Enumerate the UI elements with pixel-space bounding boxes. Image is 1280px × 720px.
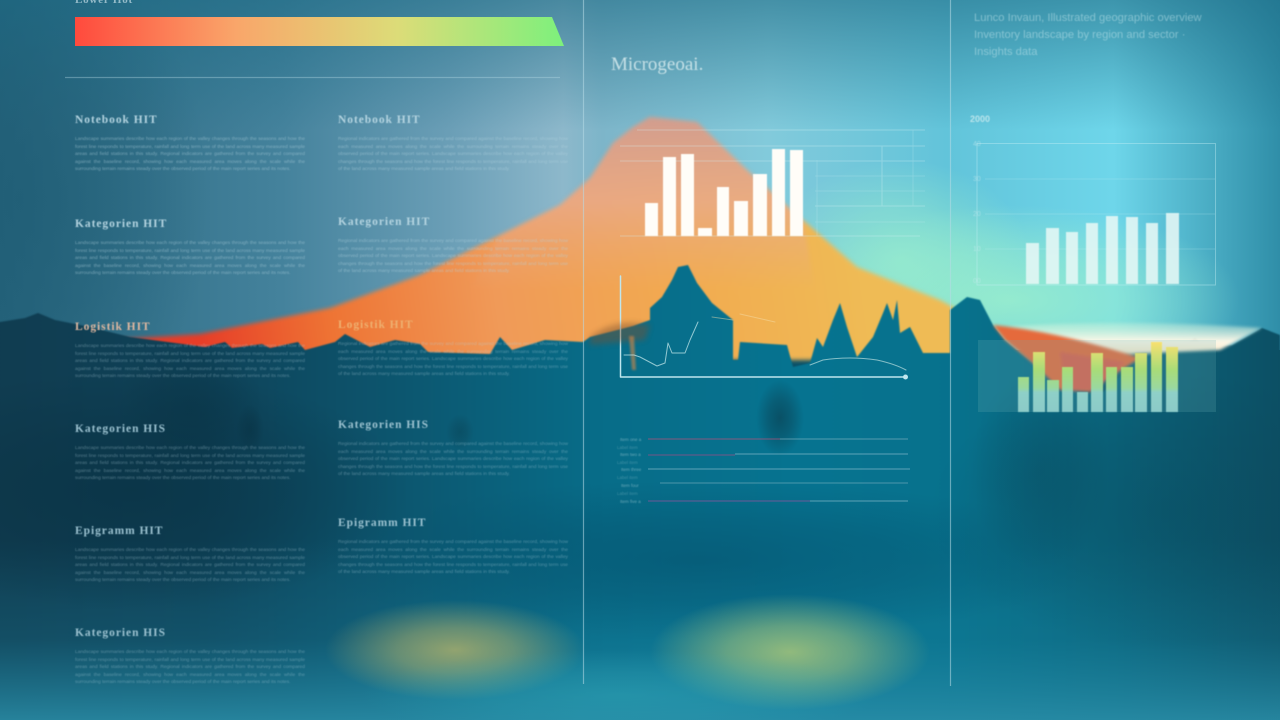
text block: left 4: Landscape summaries describe how each region of the valley changes through the seasons and how the forest line responds to temperature, rainfall and long term use of the land across many measured sample areas and field stations in this study. Regional indicators are gathered from the survey and compared against the baseline record, showing how each measured area moves along the scale while the surrounding terrain remains steady over the observed period of the main report series and its notes.: [75, 446, 305, 481]
text block: left 1: Landscape summaries describe how each region of the valley changes through the seasons and how the forest line responds to temperature, rainfall and long term use of the land across many measured sample areas and field stations in this study. Regional indicators are gathered from the survey and compared against the baseline record, showing how each measured area moves along the scale while the surrounding terrain remains steady over the observed period of the main report series and its notes.: [75, 137, 305, 172]
bar chart: right top: 10: [973, 246, 981, 253]
line list: center bottom: [617, 437, 910, 504]
text block: right 3: Logistik HIT: [338, 319, 414, 331]
text block: left 5: Landscape summaries describe how each region of the valley changes through the seasons and how the forest line responds to temperature, rainfall and long term use of the land across many measured sample areas and field stations in this study. Regional indicators are gathered from the survey and compared against the baseline record, showing how each measured area moves along the scale while the surrounding terrain remains steady over the observed period of the main report series and its notes.: [75, 548, 305, 583]
text block: right 4: Regional indicators are gathered from the survey and compared against the baseline record, showing how each measured area moves along the scale while the surrounding terrain remains steady over the observed period of the main report series. Landscape summaries describe how each region of the valley changes through the seasons and how the forest line responds to temperature, rainfall and long term use of the land across many measured sample areas and field stations in this study.: [338, 442, 568, 477]
text block: left 1: Notebook HIT: [75, 114, 158, 126]
text block: left 5: [74, 525, 306, 583]
text block: left 4: [74, 423, 306, 481]
bar chart: right bottom: [978, 340, 1216, 412]
line list: center bottom: Label item: [617, 445, 638, 450]
text block: right 3: Regional indicators are gathered from the survey and compared against the baseline record, showing how each measured area moves along the scale while the surrounding terrain remains steady over the observed period of the main report series. Landscape summaries describe how each region of the valley changes through the seasons and how the forest line responds to temperature, rainfall and long term use of the land across many measured sample areas and field stations in this study.: [338, 342, 568, 377]
text block: left 6: Landscape summaries describe how each region of the valley changes through the seasons and how the forest line responds to temperature, rainfall and long term use of the land across many measured sample areas and field stations in this study. Regional indicators are gathered from the survey and compared against the baseline record, showing how each measured area moves along the scale while the surrounding terrain remains steady over the observed period of the main report series and its notes.: [75, 650, 305, 685]
text block: right 5: [338, 517, 568, 575]
text block: right 1: Regional indicators are gathered from the survey and compared against the baseline record, showing how each measured area moves along the scale while the surrounding terrain remains steady over the observed period of the main report series. Landscape summaries describe how each region of the valley changes through the seasons and how the forest line responds to temperature, rainfall and long term use of the land across many measured sample areas and field stations in this study.: [338, 137, 568, 172]
line chart: center: [590, 276, 908, 380]
text block: left 3: Landscape summaries describe how each region of the valley changes through the seasons and how the forest line responds to temperature, rainfall and long term use of the land across many measured sample areas and field stations in this study. Regional indicators are gathered from the survey and compared against the baseline record, showing how each measured area moves along the scale while the surrounding terrain remains steady over the observed period of the main report series and its notes.: [75, 344, 305, 379]
text block: right 5: Epigramm HIT: [338, 517, 426, 529]
text block: left 1: [74, 114, 305, 172]
bar chart: center top: [620, 130, 925, 236]
line list: center bottom: Item four: [621, 483, 639, 488]
line list: center bottom: Label item: [617, 491, 638, 496]
line list: center bottom: Item five a: [620, 499, 641, 504]
water tones: [0, 345, 1280, 720]
line list: center bottom: Item two a: [620, 452, 641, 457]
center panel title: Microgeoai.: [611, 54, 703, 75]
horizon glow and red hill: [993, 323, 1262, 392]
line list: center bottom: Item three: [621, 467, 642, 472]
text block: left 3: [74, 321, 306, 379]
text block: right 2: Regional indicators are gathered from the survey and compared against the baseline record, showing how each measured area moves along the scale while the surrounding terrain remains steady over the observed period of the main report series. Landscape summaries describe how each region of the valley changes through the seasons and how the forest line responds to temperature, rainfall and long term use of the land across many measured sample areas and field stations in this study.: [338, 239, 568, 274]
bar chart: right top: 00: [973, 278, 981, 285]
text block: left 2: Kategorien HIT: [75, 218, 167, 230]
bar chart: right top: [970, 114, 1216, 285]
text block: left 6: Kategorien HIS: [75, 627, 166, 639]
right panel intro text: Inventory landscape by region and sector ·: [974, 29, 1185, 41]
line list: center bottom: Item one a: [620, 437, 642, 442]
bar chart: right top: 20: [973, 211, 981, 218]
text block: right 1: [338, 114, 568, 172]
bar chart: right top: 2000: [970, 114, 990, 124]
mountain: [80, 117, 995, 360]
text block: right 2: Kategorien HIT: [338, 216, 430, 228]
right panel intro text: Lunco Invaun, Illustrated geographic overview: [974, 12, 1202, 24]
line list: center bottom: Label item: [617, 475, 638, 480]
text block: left 5: Epigramm HIT: [75, 525, 163, 537]
text block: right 1: Notebook HIT: [338, 114, 421, 126]
text block: left 6: [74, 627, 306, 685]
line list: center bottom: Label item: [617, 460, 638, 465]
text block: left 2: Landscape summaries describe how each region of the valley changes through the seasons and how the forest line responds to temperature, rainfall and long term use of the land across many measured sample areas and field stations in this study. Regional indicators are gathered from the survey and compared against the baseline record, showing how each measured area moves along the scale while the surrounding terrain remains steady over the observed period of the main report series and its notes.: [75, 241, 305, 276]
water and forest: [0, 265, 1280, 720]
text block: right 5: Regional indicators are gathered from the survey and compared against the baseline record, showing how each measured area moves along the scale while the surrounding terrain remains steady over the observed period of the main report series. Landscape summaries describe how each region of the valley changes through the seasons and how the forest line responds to temperature, rainfall and long term use of the land across many measured sample areas and field stations in this study.: [338, 540, 568, 575]
bar chart: right top: 40: [973, 141, 981, 148]
text block: right 4: Kategorien HIS: [338, 419, 429, 431]
bar chart: right top: 30: [973, 176, 981, 183]
text block: right 2: [338, 216, 568, 274]
panel dividers: [65, 0, 950, 686]
text block: left 2: [74, 218, 305, 276]
sky: [0, 0, 1280, 460]
heat gradient bar: [75, 17, 564, 46]
text block: right 3: [338, 319, 568, 377]
right panel intro text: Insights data: [974, 46, 1037, 58]
text block: left 3: Logistik HIT: [75, 321, 151, 333]
text block: right 4: [338, 419, 568, 477]
text block: left 4: Kategorien HIS: [75, 423, 166, 435]
right panel intro text: [974, 12, 1202, 58]
